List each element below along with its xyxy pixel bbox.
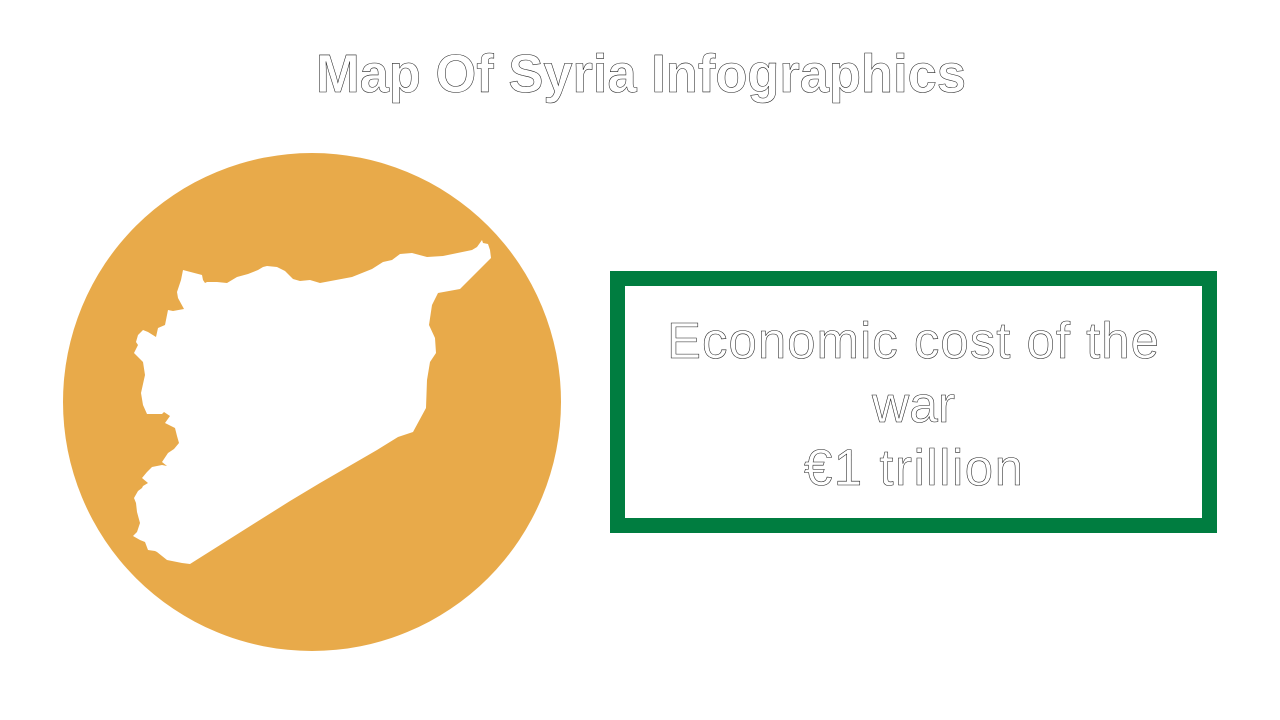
- orange circle: [63, 153, 561, 651]
- green frame: [618, 278, 1210, 526]
- Syria silhouette: [133, 240, 491, 564]
- callout text: Economic cost of the: [667, 312, 1159, 369]
- callout box: economic cost: [618, 278, 1210, 526]
- callout text: [667, 312, 1159, 496]
- title: Map Of Syria Infographics: [316, 44, 966, 104]
- callout text: €1 trillion: [804, 439, 1023, 496]
- map graphic: Syria in circle: [63, 153, 561, 651]
- callout text: war: [871, 376, 955, 433]
